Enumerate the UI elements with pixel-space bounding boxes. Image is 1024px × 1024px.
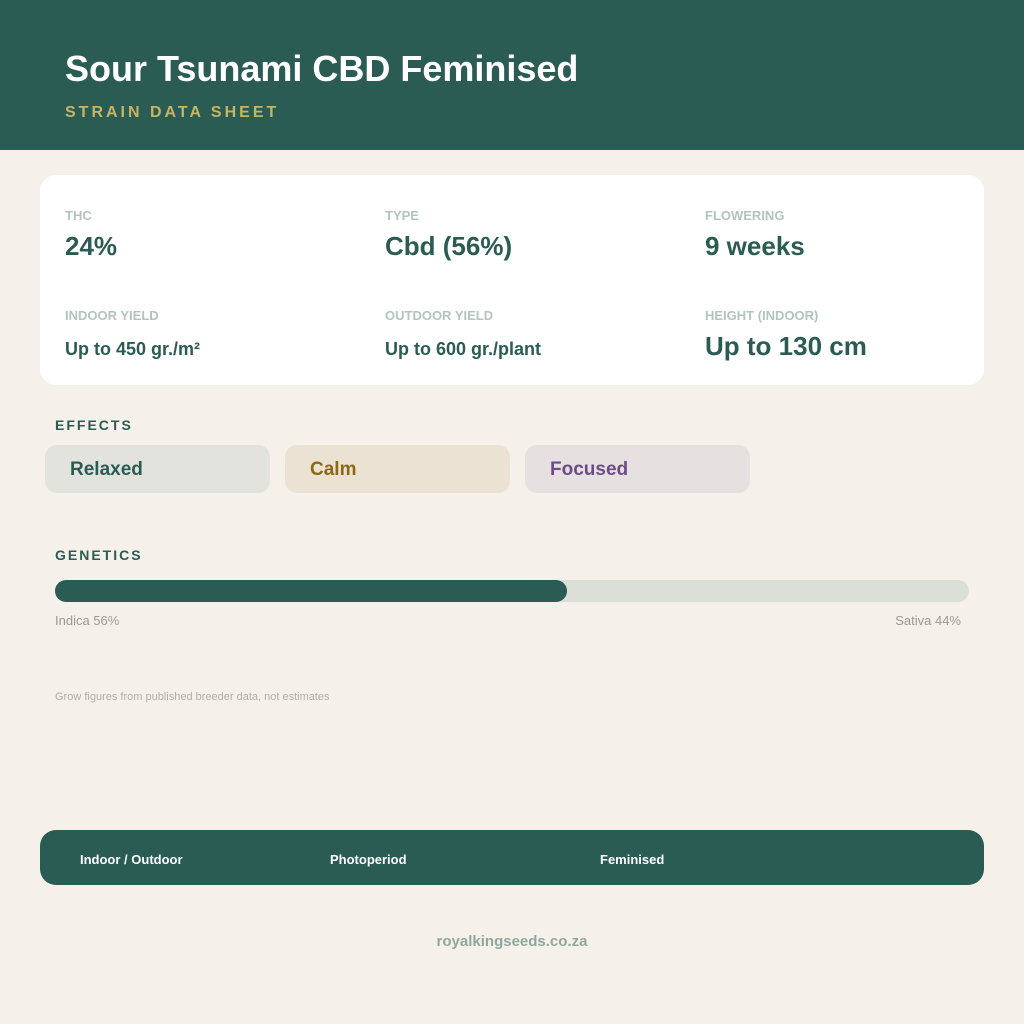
stat: height label: HEIGHT (INDOOR) — [705, 308, 818, 323]
footer: website: royalkingseeds.co.za — [437, 933, 587, 950]
bar fill: indica 56% — [55, 580, 567, 602]
stat: indoor yield value: Up to 450 gr./m² — [65, 339, 200, 359]
strip item: photoperiod: Photoperiod — [330, 852, 407, 867]
heading: effects: EFFECTS — [55, 417, 133, 433]
stat: flowering value: 9 weeks — [705, 231, 805, 261]
stat: THC value: 24% — [65, 231, 117, 261]
effect chip: calm — [285, 445, 510, 493]
stat: outdoor yield value: Up to 600 gr./plant — [385, 339, 541, 359]
stat: outdoor yield label: OUTDOOR YIELD — [385, 308, 493, 323]
title: Sour Tsunami CBD Feminised — [65, 48, 578, 89]
panel: cultivation strip — [40, 830, 984, 885]
stat: flowering label: FLOWERING — [705, 208, 784, 223]
effect chip: focused: Focused — [550, 459, 628, 480]
bar label: indica: Indica 56% — [55, 613, 119, 628]
effect chip: calm: Calm — [310, 459, 356, 480]
header band — [0, 0, 1024, 150]
chart: genetics bar — [55, 580, 969, 602]
stat: THC label: THC — [65, 208, 92, 223]
effect chip: focused — [525, 445, 750, 493]
panel: strain stats card — [40, 175, 984, 385]
strip item: feminised: Feminised — [600, 852, 664, 867]
footnote: Grow figures from published breeder data, not estimates — [55, 691, 330, 703]
heading: genetics: GENETICS — [55, 547, 143, 563]
stat: type label: TYPE — [385, 208, 419, 223]
stat: height value: Up to 130 cm — [705, 331, 867, 361]
stat: type value: Cbd (56%) — [385, 231, 512, 261]
strip item: environment: Indoor / Outdoor — [80, 852, 183, 867]
effect chip: relaxed: Relaxed — [70, 459, 143, 480]
subtitle: STRAIN DATA SHEET — [65, 104, 279, 121]
effect chip: relaxed — [45, 445, 270, 493]
bar label: sativa: Sativa 44% — [895, 613, 961, 628]
stat: indoor yield label: INDOOR YIELD — [65, 308, 159, 323]
